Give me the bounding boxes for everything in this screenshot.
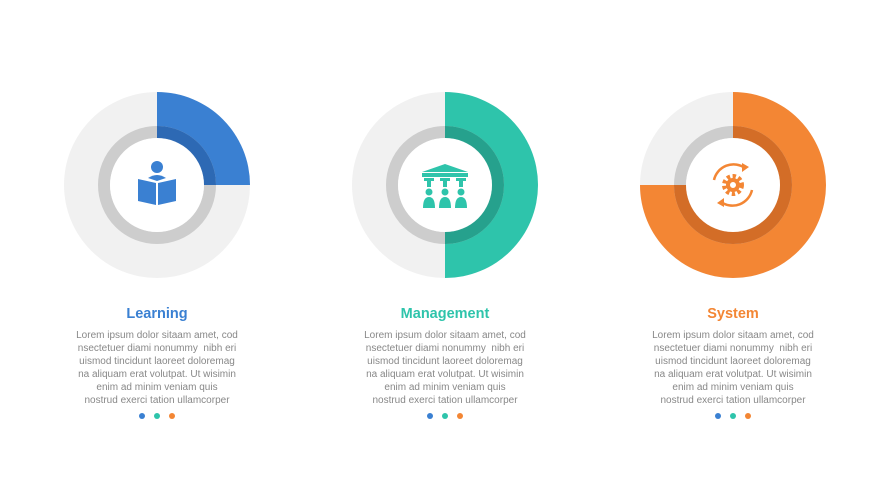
chart: system [640, 92, 826, 278]
icon: gear cycle [714, 164, 752, 206]
text block: management: uismod tincidunt laoreet doloremag [367, 356, 523, 367]
text block: system: uismod tincidunt laoreet doloremag [655, 356, 811, 367]
text block: learning: nostrud exerci tation ullamcorper [84, 395, 230, 406]
text block: management: Management [401, 306, 489, 322]
icon: reader [138, 161, 176, 205]
text block: learning: Lorem ipsum dolor sitaam amet, cod [76, 330, 238, 341]
icon: institution [422, 164, 468, 208]
text block: system: Lorem ipsum dolor sitaam amet, cod [652, 330, 814, 341]
text block: system: na aliquam erat volutpat. Ut wisimin [654, 369, 812, 380]
text block: system [652, 306, 814, 419]
text block: learning: uismod tincidunt laoreet doloremag [79, 356, 235, 367]
text block: learning [76, 306, 238, 419]
text block: system: nostrud exerci tation ullamcorper [660, 395, 806, 406]
text block: system: enim ad minim veniam quis [672, 382, 794, 393]
chart: learning [64, 92, 250, 278]
text block: learning: enim ad minim veniam quis [96, 382, 218, 393]
text block: management [364, 306, 526, 419]
text block: management: nsectetuer diami nonummy nibh eri [366, 343, 524, 354]
text block: system: nsectetuer diami nonummy nibh eri [654, 343, 812, 354]
text block: management: na aliquam erat volutpat. Ut wisimin [366, 369, 524, 380]
chart: management [352, 92, 538, 278]
text block: management: Lorem ipsum dolor sitaam amet, cod [364, 330, 526, 341]
text block: system: System [707, 306, 759, 322]
text block: management: enim ad minim veniam quis [384, 382, 506, 393]
text block: learning: nsectetuer diami nonummy nibh eri [78, 343, 236, 354]
text block: learning: Learning [126, 306, 188, 322]
donut charts [64, 92, 826, 278]
text block: management: nostrud exerci tation ullamcorper [372, 395, 518, 406]
text block: learning: na aliquam erat volutpat. Ut wisimin [78, 369, 236, 380]
